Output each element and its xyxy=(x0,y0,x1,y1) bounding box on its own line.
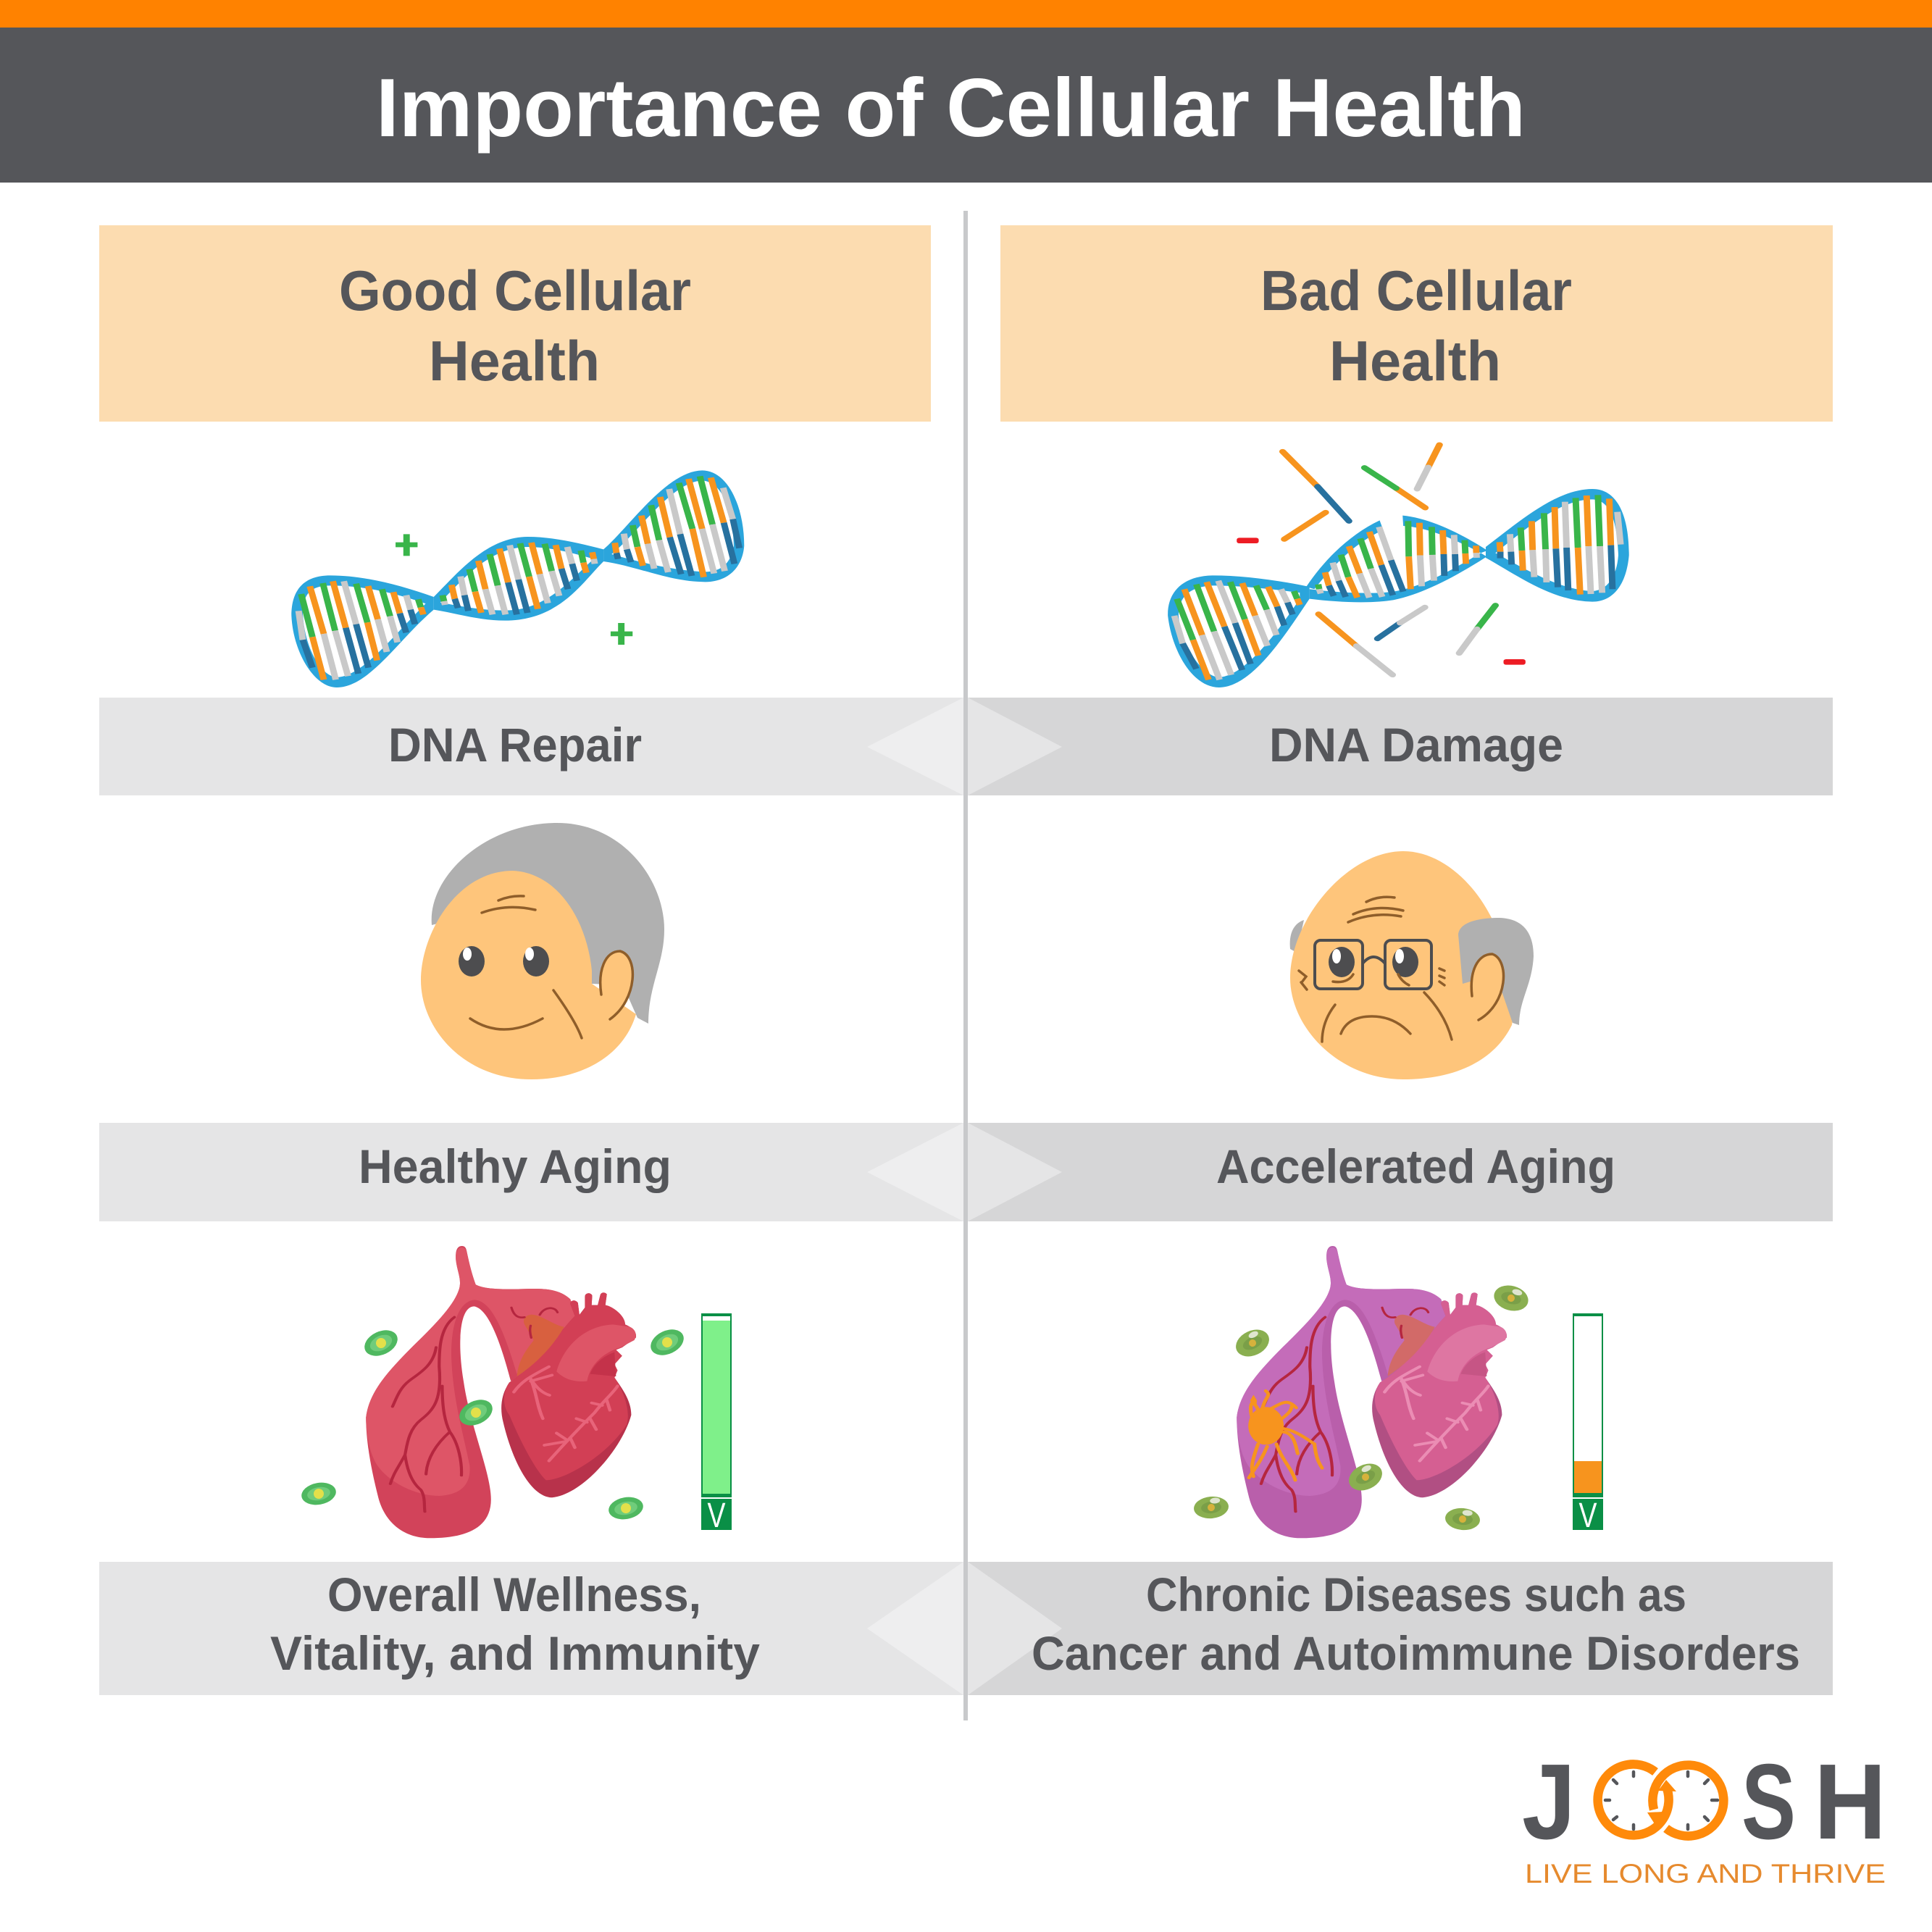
row: aging labels: Healthy Aging xyxy=(359,1139,672,1193)
icon: healthy DNA xyxy=(291,470,744,687)
title banner xyxy=(0,28,1932,183)
icon: sad elderly face with glasses xyxy=(1290,851,1534,1079)
gauge: full vitality xyxy=(701,1313,732,1535)
panel header: bad cellular health: Bad Cellular xyxy=(1260,259,1572,322)
logo: JOOSH: H xyxy=(1814,1742,1886,1862)
row: DNA labels: DNA Repair xyxy=(388,718,642,771)
panel header: good cellular health: Health xyxy=(429,329,600,393)
icon: linked clocks xyxy=(1598,1764,1723,1836)
row: outcome labels: Chronic Diseases such as xyxy=(1146,1568,1686,1621)
logo: JOOSH xyxy=(1522,1742,1886,1889)
centre divider xyxy=(963,211,968,1720)
gauge: low vitality: V xyxy=(1579,1497,1597,1535)
row: DNA labels: DNA Damage xyxy=(1269,718,1563,771)
row: outcome labels xyxy=(99,1562,1833,1695)
icon: damaged cells xyxy=(1193,1281,1531,1531)
icon: minus signs xyxy=(1237,538,1526,665)
icon: plus signs xyxy=(396,534,632,645)
icon: glasses xyxy=(1315,940,1431,989)
panel header: bad cellular health: Health xyxy=(1329,329,1501,393)
title: Importance of Cellular Health xyxy=(376,62,1526,154)
panel header: good cellular health: Good Cellular xyxy=(339,259,691,322)
logo: JOOSH: S xyxy=(1741,1742,1796,1862)
icon: healthy cells xyxy=(300,1324,688,1522)
panel header: good cellular health xyxy=(99,225,931,422)
row: outcome labels: Cancer and Autoimmune Disorders xyxy=(1032,1626,1800,1680)
icon: happy elderly face xyxy=(421,823,664,1079)
top orange bar xyxy=(0,0,1932,28)
logo: JOOSH: LIVE LONG AND THRIVE xyxy=(1525,1859,1886,1889)
row: outcome labels: Overall Wellness, xyxy=(327,1568,701,1621)
logo: JOOSH: J xyxy=(1522,1742,1576,1862)
gauge: full vitality: V xyxy=(707,1497,726,1535)
icon: diseased lungs and heart xyxy=(1237,1246,1507,1538)
row: DNA labels xyxy=(99,698,1833,795)
row: outcome labels: Vitality, and Immunity xyxy=(270,1626,760,1680)
icon: broken DNA fragments xyxy=(1283,445,1495,675)
icon: cancer cell xyxy=(1248,1391,1322,1480)
panel header: bad cellular health xyxy=(1000,225,1833,422)
icon: healthy lungs and heart xyxy=(366,1246,636,1538)
gauge: low vitality xyxy=(1573,1313,1603,1535)
icon: damaged DNA xyxy=(1168,445,1629,687)
row: aging labels xyxy=(99,1123,1833,1221)
row: aging labels: Accelerated Aging xyxy=(1216,1139,1615,1193)
